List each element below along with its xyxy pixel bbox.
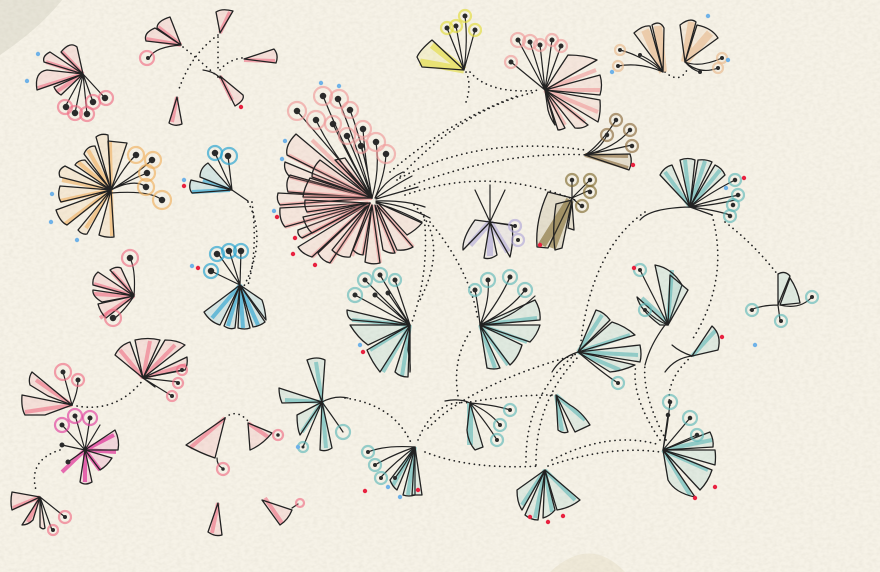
flower: teal bottom centre [517,470,580,520]
flower: pink top centre [505,33,602,130]
flower: olive [537,174,596,250]
flower: teal right middle [634,264,688,365]
flower: teal fan right of centre [552,310,641,389]
flower: lilac [463,185,524,259]
flower: top-left pink [36,45,113,121]
accent dots: red [182,105,746,524]
flower: pink bottom left [11,492,71,535]
dotted connecting lines [34,35,778,490]
flower: pink lower left lower [22,364,84,415]
flower: brown small [585,114,638,170]
flower: teal far right [746,272,818,327]
flower: orange fan [56,134,171,237]
flower: teal lower left [279,358,350,452]
flower: magenta [55,409,119,484]
flower: pink lower left upper [115,338,187,401]
petals: inner layer [303,158,372,233]
petal pair: pink bottom upper [186,418,283,475]
flower: small pink left [93,250,138,326]
flower: teal centre left [347,268,410,377]
accent dots: blue [25,14,757,499]
flower: teal bottom right [663,395,716,497]
flower: yellow [417,10,481,70]
flower: teal lower middle [445,400,516,450]
stalks with ringed buds [288,87,430,222]
flower: blue upper [190,146,248,201]
flower: blue lower [204,244,266,329]
flower cluster: scattered pink petals [140,10,277,125]
flower pair: beige [613,20,727,73]
flower: teal small right of middle [556,395,590,433]
flower: teal top right [640,158,744,222]
flower: teal lower centre-left [362,446,422,496]
flower: teal centre [469,270,540,369]
petal pair: pink bottom lower [208,498,304,536]
petal: teal single right [665,326,719,372]
flower: large pink fan [277,87,430,264]
petals: outer layer [277,134,422,264]
